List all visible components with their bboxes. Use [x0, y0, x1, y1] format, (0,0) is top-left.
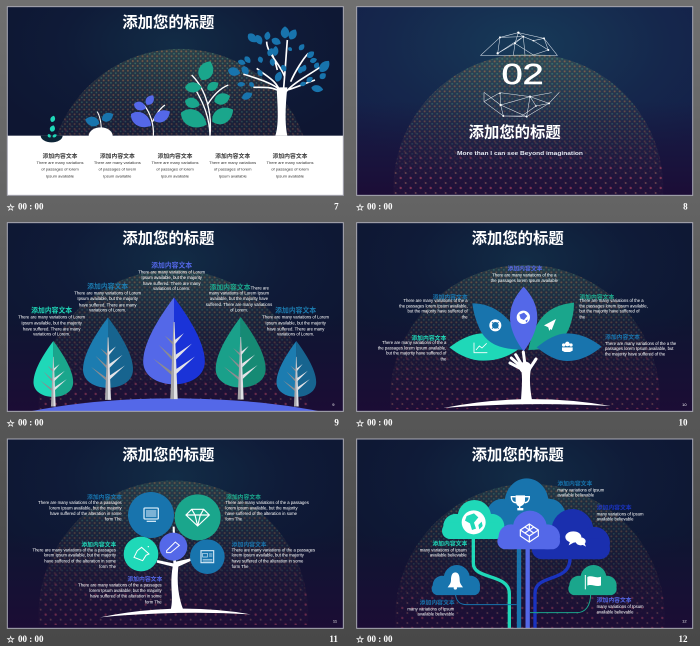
text: tree 2: variations of Lorem. [89, 307, 126, 312]
text: upper left: There are many variations of the a passages [38, 500, 122, 505]
petal top [510, 287, 537, 351]
text: middle right: 添加内容文本 [232, 540, 267, 548]
text: tree 4: 添加内容文本 [210, 282, 251, 291]
text block: stage captions: of passages of lorem [99, 167, 137, 172]
text: chat cloud: many variations of Ipsum [597, 511, 644, 516]
text: tree 1 [18, 306, 86, 336]
footer: slide 8: 8 [683, 201, 688, 211]
footer: slide 12: 00 : 00 [367, 634, 393, 644]
cloud: trophy [484, 478, 566, 536]
text: trophy cloud: many variations of Ipsum [557, 487, 605, 492]
text block: stage captions: There are many variations [151, 160, 199, 165]
text: tree 4: There are [251, 285, 270, 290]
text: lower left [378, 334, 447, 361]
subtitle: More than I can see Beyond imagination [457, 151, 583, 157]
footer: slide 9: ☆ [7, 419, 16, 429]
footer: slide 10: ☆ [356, 419, 365, 429]
text: tree 2 [74, 282, 142, 312]
text: middle right: There are many variations of the a passages [232, 547, 315, 552]
icon: purple plant [128, 93, 173, 136]
footer: slide 8: 00 : 00 [367, 201, 393, 211]
text: tree 4: available, but the majority have [210, 296, 269, 301]
petal left low [449, 333, 520, 361]
icon: paper plane [544, 319, 556, 331]
tree 2 blue [83, 317, 133, 400]
text: lower left: the passages lorem Ipsum available, [378, 345, 446, 350]
tree 5 blue [276, 341, 316, 406]
frame [357, 439, 693, 628]
text: tree 1: There are many variations of Lorem [18, 315, 86, 320]
text: upper left: but the majority have suffered of [407, 308, 468, 313]
text: top petal: 添加内容文本 [508, 264, 543, 272]
text: tree 5: have suffered. There are many [267, 326, 325, 331]
text: flag cloud: many variations of Ipsum [597, 604, 644, 609]
cloud: cube [497, 511, 560, 549]
text: tree 3 [138, 260, 206, 291]
text: upper left: lorem Ipsum available, but the majority [49, 505, 123, 510]
footer: slide 9 [7, 418, 339, 429]
icon: line chart [474, 343, 487, 353]
footer: slide 7: 7 [334, 201, 339, 211]
text: middle right: have suffered of the alteration in some [232, 558, 304, 563]
text: upper right: There are many variations of the a [579, 298, 644, 303]
text block: stage captions: There are many variations [209, 160, 256, 165]
section number: 02 [502, 59, 544, 91]
text: upper left: the passages lorem Ipsum available, [399, 303, 468, 308]
text: tree 5: variations of Lorem. [277, 331, 314, 336]
icon: lifebuoy [491, 321, 500, 330]
text: trophy cloud: available believable [557, 493, 595, 498]
circle: flask [124, 537, 158, 571]
text: upper right: There are many variations of the a passages [225, 500, 309, 505]
ground arc [100, 609, 251, 617]
text: middle left: 添加内容文本 [81, 540, 116, 548]
text: tree 4 [206, 282, 272, 312]
panel: slide 9 five trees [7, 223, 343, 429]
footer: slide 9: 00 : 00 [18, 418, 44, 428]
footer: slide 12: ☆ [356, 635, 365, 645]
text block: stage captions: 添加内容文本 [158, 152, 193, 160]
title: 添加您的标题 [122, 13, 214, 31]
text: tree 4: suffered. There are many variations [206, 302, 272, 307]
text block: stage captions: Ipsum available [161, 173, 190, 178]
slide number: 9 [332, 402, 335, 407]
circle: diamond [175, 494, 221, 540]
text: tree 3: There are many variations of Lorem [138, 270, 206, 275]
text: lower right: the majority have suffered of the [605, 351, 666, 356]
text: tree 2: have suffered. There are many [79, 302, 137, 307]
text: lower right: There are many variations of the a the [605, 341, 677, 346]
connector pipes [455, 537, 591, 628]
text: lower left: but the majority have suffered of [386, 351, 447, 356]
text block: stage captions: Ipsum available [103, 173, 132, 178]
text block: stage captions: 添加内容文本 [273, 152, 308, 160]
text: globe cloud: 添加内容文本 [432, 540, 467, 548]
text: flag cloud: 添加内容文本 [597, 596, 632, 604]
text: upper right: but the majority have suffered of [579, 308, 640, 313]
icon: globe [517, 311, 530, 324]
text: top petal: the passages lorem Ipsum available [491, 278, 559, 283]
icon: seed stage [41, 115, 63, 142]
slide number: 11 [333, 618, 338, 623]
text: lower right: 添加内容文本 [605, 333, 640, 341]
text: tree 1: 添加内容文本 [31, 306, 72, 315]
text: tree 3: variations of Lorem. [153, 286, 190, 291]
text: upper right [225, 493, 309, 522]
tree 1 teal [33, 341, 73, 406]
footer: slide 7: ☆ [7, 202, 16, 212]
text block: stage captions: Ipsum available [276, 173, 305, 178]
text: tree 1: variations of Lorem. [33, 331, 70, 336]
text: upper right: the passages lorem Ipsum available, [579, 303, 648, 308]
footer: slide 11 [7, 634, 338, 645]
text block: stage captions: 添加内容文本 [100, 152, 135, 160]
text: bell cloud [407, 599, 455, 617]
text: middle left: form The [99, 564, 117, 569]
frame [7, 223, 343, 411]
text block: stage captions: of passages of lorem [214, 167, 252, 172]
text block: stage captions [36, 152, 314, 178]
icon: people [562, 342, 573, 352]
text: bottom: form The [145, 599, 162, 604]
text: chat cloud: 添加内容文本 [597, 503, 632, 511]
petal right mid [528, 303, 574, 350]
text: trophy cloud: 添加内容文本 [557, 479, 592, 487]
text: middle left: have suffered of the alteration in some [44, 558, 117, 563]
footer: slide 10 [356, 418, 688, 429]
text: bell cloud: many variations of Ipsum [407, 606, 455, 611]
text: top petal [491, 264, 559, 283]
text: tree 4: many variations of Lorem Ipsum [209, 291, 269, 296]
circle: pen [159, 533, 187, 561]
panel: slide 8 section divider [356, 7, 693, 212]
text: globe cloud: many variations of Ipsum [420, 548, 467, 553]
text: tree 1: have suffered. There are many [23, 326, 81, 331]
text: middle left: lorem Ipsum available, but the majority [44, 553, 117, 558]
cloud: chat [532, 509, 610, 559]
footer: slide 8 [356, 201, 688, 212]
text: middle left: There are many variations of the a passages [33, 547, 116, 552]
petal right low [537, 333, 602, 361]
footer: slide 7 [7, 201, 339, 212]
text: upper right: form The [225, 517, 243, 522]
circle: newspaper [190, 539, 225, 574]
text: tree 5: Ipsum available, but the majority [265, 320, 327, 325]
text: middle right [232, 540, 315, 569]
text: upper right: 添加内容文本 [226, 493, 261, 501]
text: tree 1: Ipsum available, but the majority [21, 320, 83, 325]
text block: stage captions: of passages of lorem [41, 167, 79, 172]
text: upper left [399, 293, 468, 319]
text: bell cloud: available believable [418, 612, 455, 617]
icon: sprout stage [84, 110, 115, 136]
text: upper left: the [462, 314, 468, 319]
panel: slide 12 cloud tree [356, 439, 693, 645]
text: tree 5: There are many variations of Lorem [262, 315, 330, 320]
text: globe cloud [420, 540, 467, 558]
frame [357, 223, 693, 411]
ground arc [443, 399, 611, 408]
text block: stage captions: Ipsum available [219, 173, 247, 178]
text: bottom: lorem Ipsum available, but the majority [89, 588, 163, 593]
tree 4 green [216, 317, 266, 399]
text: upper left [38, 493, 123, 522]
text: tree 3: Ipsum available, but the majority [141, 275, 203, 280]
text: upper left: There are many variations of the a [403, 298, 468, 303]
text: lower left: 添加内容文本 [411, 334, 446, 342]
footer: slide 10: 10 [679, 418, 688, 428]
icon: wireframe upper dome [481, 31, 557, 55]
hand and tree trunk [510, 352, 536, 400]
text: upper right: lorem Ipsum available, but the majority [225, 505, 298, 510]
cloud: flag [568, 565, 617, 595]
text: middle right: form The [232, 564, 249, 569]
text: trophy cloud [557, 479, 605, 498]
text: tree 5 [262, 306, 330, 336]
footer: slide 11: ☆ [7, 635, 16, 645]
text: bottom [78, 575, 163, 604]
text block: stage captions: There are many variations [266, 160, 314, 165]
cloud: bell [432, 565, 480, 595]
hill [30, 398, 320, 411]
icon: wireframe lower dome [484, 92, 559, 118]
text: upper right: 添加内容文本 [579, 293, 614, 301]
text: tree 4: of Lorem. [230, 307, 248, 312]
text: tree 2: Ipsum available, but the majority [77, 296, 139, 301]
footer: slide 10: 00 : 00 [367, 418, 393, 428]
tree 3 large indigo [143, 297, 205, 399]
text: tree 2: There are many variations of Lorem [74, 291, 142, 296]
text block: stage captions: of passages of lorem [156, 167, 194, 172]
title: 添加您的标题 [122, 229, 214, 247]
text: tree 3: have suffered. There are many [143, 281, 201, 286]
text: middle right: lorem Ipsum available, but the majority [232, 553, 305, 558]
title: 添加您的标题 [472, 446, 564, 464]
text: bottom: 添加内容文本 [127, 575, 162, 583]
text: tree 5: 添加内容文本 [275, 306, 316, 315]
title: 添加您的标题 [122, 446, 214, 464]
text: upper left: 添加内容文本 [87, 493, 122, 501]
text block: stage captions: of passages of lorem [271, 167, 309, 172]
panel: slide 10 hand and petals [356, 223, 693, 429]
text: upper right: the [579, 314, 586, 319]
petal left mid [472, 303, 525, 350]
icon: full tree [227, 26, 332, 136]
text: tree 2: 添加内容文本 [87, 282, 128, 291]
footer: slide 11: 11 [329, 634, 338, 644]
text: middle left [33, 540, 117, 569]
text block: stage captions: There are many variations [94, 160, 141, 165]
icon: green plant [177, 58, 237, 136]
text block: stage captions: 添加内容文本 [215, 152, 250, 160]
text: chat cloud [597, 503, 644, 522]
footer: slide 8: ☆ [356, 202, 365, 212]
title: 添加您的标题 [472, 229, 564, 247]
footer: slide 7: 00 : 00 [18, 201, 44, 211]
text: chat cloud: available believable [597, 517, 634, 522]
text: lower left: the [440, 356, 447, 361]
text block: stage captions: 添加内容文本 [43, 152, 78, 160]
tree trunk [157, 527, 191, 610]
text: bell cloud: 添加内容文本 [420, 599, 455, 607]
text: upper right: have suffered of the alteration in some [225, 511, 298, 516]
footer: slide 9: 9 [334, 418, 339, 428]
text: globe cloud: available believable [430, 553, 467, 558]
slide number: 12 [682, 618, 687, 623]
circle: monitor [128, 492, 174, 538]
text: bottom: There are many variations of the a passages [78, 583, 162, 588]
text block: stage captions: Ipsum available [46, 173, 75, 178]
panel: slide 11 circle tree [7, 439, 343, 645]
panel: slide 7 growth stages [7, 7, 343, 212]
text block: stage captions: There are many variations [36, 160, 84, 165]
text: upper left: have suffered of the alteration in some [50, 511, 122, 516]
text: lower right [605, 333, 677, 356]
footer: slide 11: 00 : 00 [18, 634, 44, 644]
text: tree 3: 添加内容文本 [151, 260, 192, 269]
text: lower right: passages lorem Ipsum available, but [605, 346, 674, 351]
footer: slide 12: 12 [679, 634, 688, 644]
frame [7, 439, 343, 628]
text: flag cloud [597, 596, 644, 614]
section title: 添加您的标题 [469, 123, 561, 141]
text: top petal: There are many variations of the a [492, 272, 557, 277]
text: upper left: form The [105, 517, 122, 522]
text: lower left: There are many variations of the a [382, 340, 447, 345]
footer: slide 12 [356, 634, 688, 645]
text: upper left: 添加内容文本 [433, 293, 468, 301]
cloud: globe [442, 500, 504, 539]
text: upper right [579, 293, 648, 319]
text: bottom: have suffered of the alteration in some [90, 593, 162, 598]
slide number: 10 [682, 402, 687, 407]
text: flag cloud: available believable [597, 609, 634, 614]
